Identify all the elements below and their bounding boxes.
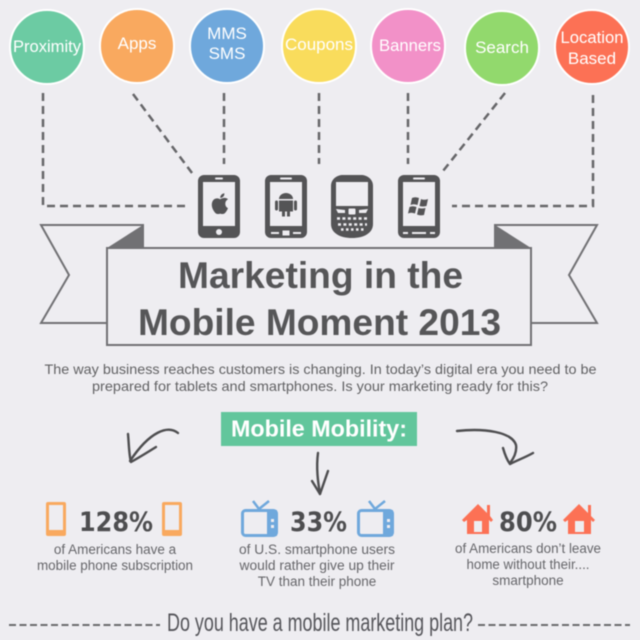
banner: main panel — [107, 248, 531, 345]
banner: right tail — [495, 225, 597, 323]
circle: Search — [465, 11, 539, 85]
banner: left tail — [41, 225, 143, 323]
intro text: The way business reaches customers is changing. In today’s digital era you need to be — [44, 361, 597, 377]
caption: of Americans have a — [54, 542, 177, 557]
stat: 128% mobile subscriptions — [37, 502, 193, 573]
connector: coupons dashed line — [318, 93, 320, 164]
arrow: left — [128, 430, 178, 462]
caption: of Americans don’t leave — [455, 541, 601, 556]
icon: Apple phone — [198, 175, 240, 238]
banner: ribbon with title — [41, 225, 597, 345]
circle: Coupons: Coupons — [285, 35, 353, 54]
caption: of U.S. smartphone users — [239, 542, 395, 557]
banner: right fold — [495, 225, 531, 248]
connector: proximity dashed line — [43, 93, 186, 206]
caption — [37, 542, 193, 573]
icon: Android phone — [265, 175, 307, 238]
caption: home without their.... — [466, 557, 590, 572]
circle: Proximity — [10, 10, 84, 84]
circle: Location Based: Location — [560, 28, 624, 47]
circle: MMS SMS — [190, 9, 264, 83]
circle: Location Based: Based — [568, 49, 616, 68]
circle: MMS SMS: MMS — [207, 24, 247, 43]
connector: search dashed line — [443, 93, 505, 171]
banner: left fold — [107, 225, 143, 248]
number: 80%: 80% — [499, 507, 557, 538]
number: 128%: 128% — [79, 507, 153, 538]
title — [138, 255, 501, 343]
icon: BlackBerry phone — [331, 175, 373, 238]
caption: would rather give up their — [238, 558, 395, 573]
connector: location dashed line — [452, 95, 593, 206]
icon: left orange phone — [46, 502, 66, 536]
number: 33%: 33% — [290, 507, 347, 538]
heading: Mobile Mobility: Mobile Mobility: — [231, 416, 407, 442]
connector: apps dashed line — [133, 94, 192, 173]
circle: Banners — [371, 9, 445, 83]
arrow: right — [457, 430, 533, 464]
connector: MMS dashed line — [223, 93, 225, 164]
icon: left TV — [242, 501, 277, 536]
intro text: prepared for tablets and smartphones. Is your marketing ready for this? — [92, 378, 548, 394]
icon: Windows phone — [398, 175, 440, 238]
title: Marketing in the — [178, 255, 463, 296]
caption — [455, 541, 601, 588]
icon: right orange phone — [162, 502, 182, 536]
connector: banners dashed line — [407, 93, 409, 164]
icon: right TV — [358, 501, 393, 536]
title: Mobile Moment 2013 — [138, 302, 501, 343]
arrow: middle — [312, 453, 328, 494]
circle: Banners: Banners — [379, 36, 441, 55]
heading: Mobile Mobility — [221, 412, 417, 446]
icon: left house — [462, 504, 493, 534]
icon: right house — [563, 504, 595, 534]
circle: Apps — [100, 9, 174, 83]
stat: 33% TV — [238, 501, 395, 589]
circle: Apps: Apps — [118, 34, 156, 53]
circle: Coupons — [282, 9, 356, 83]
stat: 80% home — [455, 504, 601, 588]
footer question: Do you have a mobile marketing plan? — [167, 609, 473, 637]
caption: mobile phone subscription — [37, 558, 193, 573]
footer: right dashes — [478, 624, 630, 626]
circle: MMS SMS: SMS — [209, 44, 245, 63]
intro text — [44, 361, 597, 394]
footer: left dashes — [9, 624, 160, 626]
circle: Search: Search — [475, 38, 529, 57]
circle: Location Based — [555, 10, 629, 84]
circle: Proximity: Proximity — [13, 37, 81, 56]
caption — [238, 542, 395, 589]
caption: TV than their phone — [258, 574, 376, 589]
caption: smartphone — [492, 573, 564, 588]
